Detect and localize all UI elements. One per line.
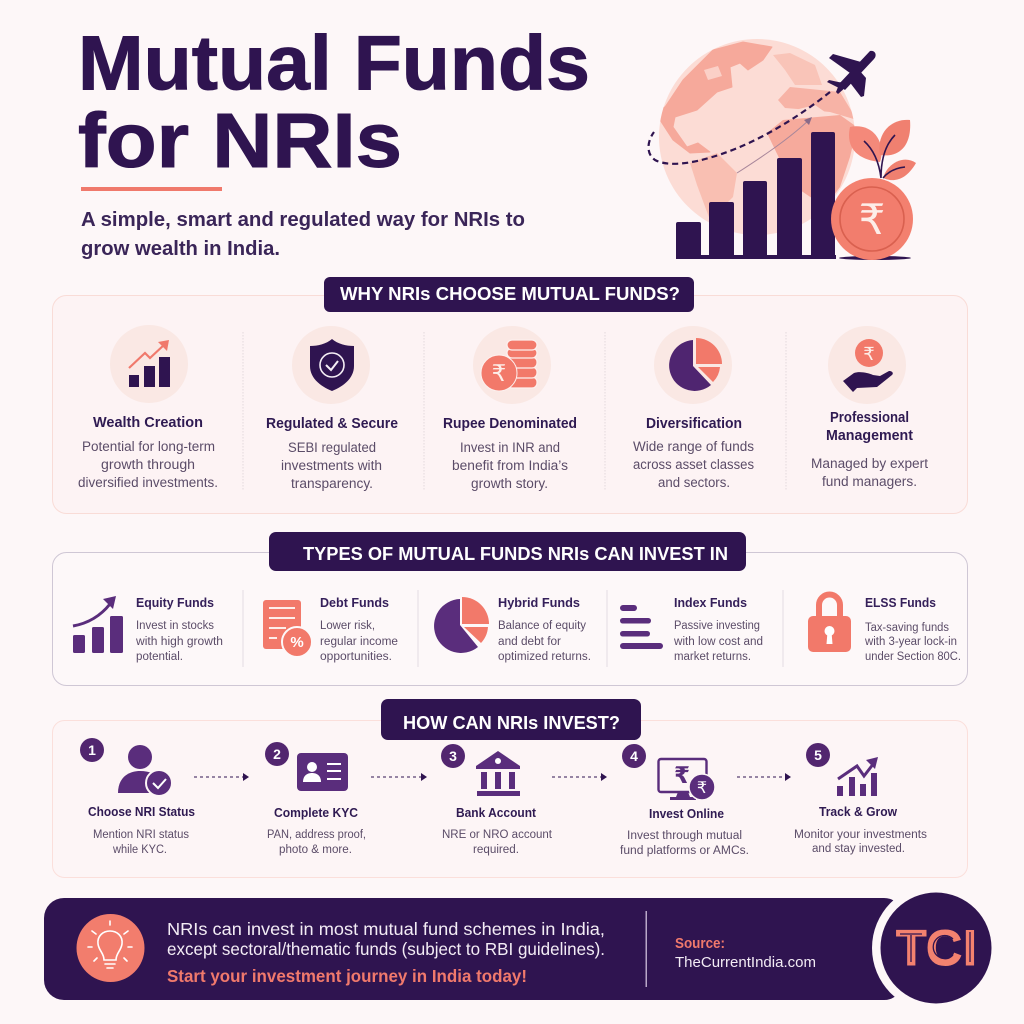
card: diversification: Diversification [646, 416, 742, 432]
globe [655, 39, 857, 235]
arrow [552, 773, 607, 781]
fund: debt [263, 596, 398, 663]
card: professional management: Professional [830, 410, 909, 426]
source: Source: [675, 935, 725, 952]
fund: debt: Debt Funds [320, 596, 389, 610]
panel: types of mutual funds [52, 532, 968, 686]
step 3: Bank Account [456, 806, 537, 820]
section heading: WHY NRIs CHOOSE MUTUAL FUNDS? [340, 284, 680, 304]
card: professional management: Management [826, 428, 913, 444]
fund: index: Index Funds [674, 596, 747, 610]
fund: debt: % [290, 634, 304, 651]
fund: equity: potential. [136, 651, 183, 663]
step 1 [80, 738, 195, 856]
fund: equity: Equity Funds [136, 596, 214, 610]
card: regulated and secure: SEBI regulated [288, 440, 376, 455]
card: diversification: and sectors. [658, 475, 730, 490]
step 5: Track & Grow [819, 805, 897, 819]
fund: equity: with high growth [135, 636, 223, 648]
bar chart [676, 132, 911, 260]
step 1: while KYC. [112, 844, 167, 856]
card: rupee denominated: Rupee Denominated [443, 416, 577, 432]
card: rupee denominated: Invest in INR and [460, 440, 560, 455]
section heading [381, 699, 641, 740]
step 1: 1 [88, 742, 96, 758]
step 2: Complete KYC [274, 806, 358, 820]
card: diversification: across asset classes [633, 457, 754, 472]
rupee coin [831, 178, 913, 260]
subtitle: A simple, smart and regulated way for NRIs to [81, 208, 525, 231]
note text: NRIs can invest in most mutual fund schemes in India, [167, 919, 605, 939]
fund: equity: Invest in stocks [136, 620, 214, 632]
fund: index [620, 596, 763, 663]
card: wealth creation [78, 325, 218, 490]
fund: hybrid [434, 596, 591, 663]
note text [167, 919, 605, 986]
card: professional management: Managed by expert [811, 456, 928, 471]
fund: ELSS: under Section 80C. [865, 651, 961, 663]
icon: light bulb [76, 914, 144, 982]
card: regulated and secure: Regulated & Secure [266, 416, 398, 432]
fund: debt: opportunities. [320, 651, 392, 663]
card: diversification: Wide range of funds [633, 439, 754, 454]
fund: debt: regular income [320, 636, 398, 648]
step 2: photo & more. [279, 844, 352, 856]
step 2: 2 [273, 746, 281, 762]
card: regulated and secure: transparency. [291, 476, 373, 491]
logo: TCI: TCI [896, 920, 977, 976]
card: wealth creation: Potential for long-term [82, 439, 215, 454]
logo: TCI [872, 884, 1000, 1012]
section heading: HOW CAN NRIs INVEST? [403, 713, 620, 733]
fund: ELSS: ELSS Funds [865, 596, 936, 610]
fund: ELSS: with 3-year lock-in [864, 636, 957, 648]
fund: index: market returns. [674, 651, 751, 663]
card: wealth creation: diversified investments. [78, 475, 218, 490]
footer banner [44, 884, 1000, 1012]
step 5 [794, 743, 927, 855]
plant leaves [849, 120, 916, 180]
panel: how can NRIs invest [52, 699, 968, 878]
subtitle: grow wealth in India. [81, 237, 280, 260]
section heading [269, 532, 746, 571]
flight path [648, 92, 830, 164]
title: for NRIs [78, 98, 402, 184]
arrow [371, 773, 427, 781]
fund: hybrid: Balance of equity [498, 620, 586, 632]
arrow [737, 773, 791, 781]
card: wealth creation: growth through [101, 457, 195, 472]
step 4: Invest through mutual [627, 830, 742, 842]
subtitle [81, 208, 525, 260]
fund: hybrid: and debt for [498, 636, 561, 648]
panel: why NRIs choose mutual funds [52, 277, 968, 514]
fund: ELSS: Tax-saving funds [865, 622, 949, 634]
step 1: Choose NRI Status [88, 805, 195, 819]
step 4: ₹ [697, 780, 707, 797]
step 5: and stay invested. [812, 843, 905, 855]
card: rupee denominated: ₹ [492, 360, 506, 386]
step 3 [441, 744, 553, 856]
card: diversification [633, 326, 754, 490]
card: regulated and secure [266, 326, 398, 491]
step 3: 3 [449, 748, 457, 764]
step 5: 5 [814, 747, 822, 763]
step 2 [265, 742, 366, 856]
fund: index: with low cost and [673, 636, 763, 648]
fund: equity [73, 596, 223, 663]
card: rupee denominated: benefit from India’s [452, 458, 568, 473]
source [675, 935, 816, 971]
card: professional management [811, 326, 928, 489]
card: wealth creation: Wealth Creation [93, 415, 203, 431]
step 3: NRE or NRO account [442, 829, 553, 841]
title: Mutual Funds [78, 20, 590, 106]
fund: debt: Lower risk, [320, 620, 375, 632]
hero illustration: globe, bars, plane, rupee coin [648, 39, 916, 260]
arrow [194, 773, 249, 781]
title [78, 20, 590, 184]
step 4: ₹ [674, 762, 690, 788]
step 5: Monitor your investments [794, 829, 927, 841]
card: professional management: ₹ [863, 344, 875, 364]
card: rupee denominated: growth story. [471, 476, 548, 491]
source: TheCurrentIndia.com [675, 954, 816, 971]
step 4: fund platforms or AMCs. [620, 845, 749, 857]
section heading: TYPES OF MUTUAL FUNDS NRIs CAN INVEST IN [303, 544, 728, 564]
step 4 [620, 744, 749, 857]
note text: Start your investment journey in India today! [167, 966, 527, 986]
fund: hybrid: optimized returns. [498, 651, 591, 663]
fund: index: Passive investing [674, 620, 760, 632]
step 4: Invest Online [649, 807, 724, 821]
step 4: 4 [630, 748, 638, 764]
step 2: PAN, address proof, [267, 829, 366, 841]
card: professional management: fund managers. [822, 474, 917, 489]
card: rupee denominated [443, 326, 577, 491]
card: regulated and secure: investments with [281, 458, 382, 473]
rupee coin: ₹ [859, 196, 885, 243]
airplane [827, 51, 876, 97]
step 3: required. [473, 844, 519, 856]
note text: except sectoral/thematic funds (subject to RBI guidelines). [167, 939, 605, 959]
step 1: Mention NRI status [93, 829, 189, 841]
fund: hybrid: Hybrid Funds [498, 596, 580, 610]
section heading [324, 277, 694, 312]
fund: ELSS [808, 594, 961, 663]
